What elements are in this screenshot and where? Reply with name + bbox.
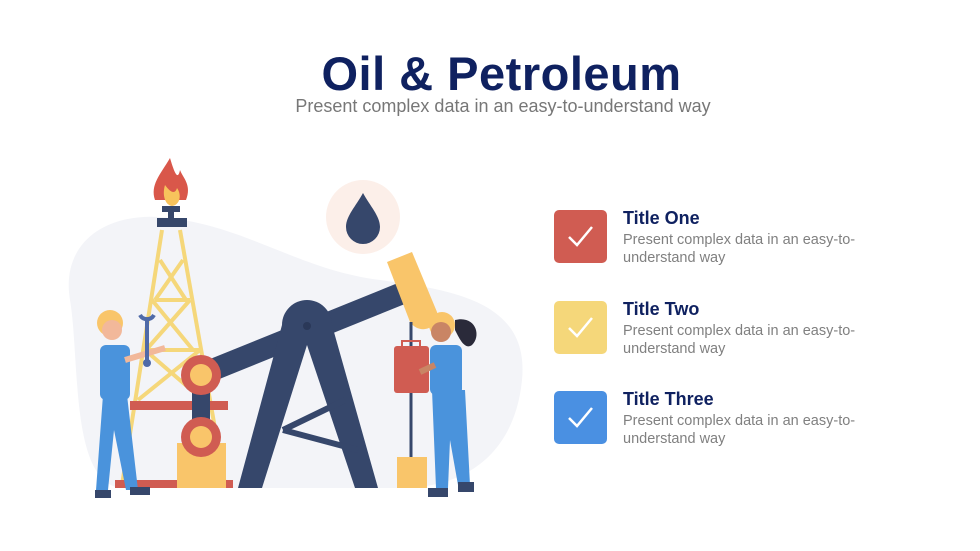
red base bars: [130, 401, 228, 410]
pump beam: [200, 290, 410, 375]
wheels: [181, 355, 221, 457]
icon: oil drop circle: [326, 180, 400, 254]
horse head: [387, 252, 437, 329]
icon: blue check box: [554, 391, 607, 444]
item: title one: [554, 208, 855, 266]
canister: [394, 341, 429, 393]
rod and box: [410, 322, 412, 458]
item: title one: understand way: [623, 250, 725, 266]
item: title two: Title Two: [623, 299, 699, 319]
worker right: [420, 312, 477, 497]
subtitle: Present complex data in an easy-to-understand way: [295, 96, 711, 116]
item: title two: [554, 299, 855, 357]
item: title one: Present complex data in an easy-to-: [623, 232, 855, 248]
item: title three: [554, 389, 855, 447]
derrick tower: [122, 230, 225, 485]
item: title three: Present complex data in an easy-to-: [623, 413, 855, 429]
item: title three: understand way: [623, 431, 725, 447]
yellow base box: [177, 443, 226, 488]
item: title two: Present complex data in an easy-to-: [623, 323, 855, 339]
connector: [192, 375, 210, 437]
background blob: [69, 217, 523, 488]
title: Oil & Petroleum: [321, 47, 682, 100]
worker left: [95, 310, 165, 498]
item: title one: Title One: [623, 208, 700, 228]
flame: [154, 158, 188, 227]
icon: red check box: [554, 210, 607, 263]
A-frame: [238, 300, 378, 488]
item: title three: Title Three: [623, 389, 714, 409]
icon: yellow check box: [554, 301, 607, 354]
item: title two: understand way: [623, 341, 725, 357]
illustration: oil pump scene: [69, 158, 522, 498]
